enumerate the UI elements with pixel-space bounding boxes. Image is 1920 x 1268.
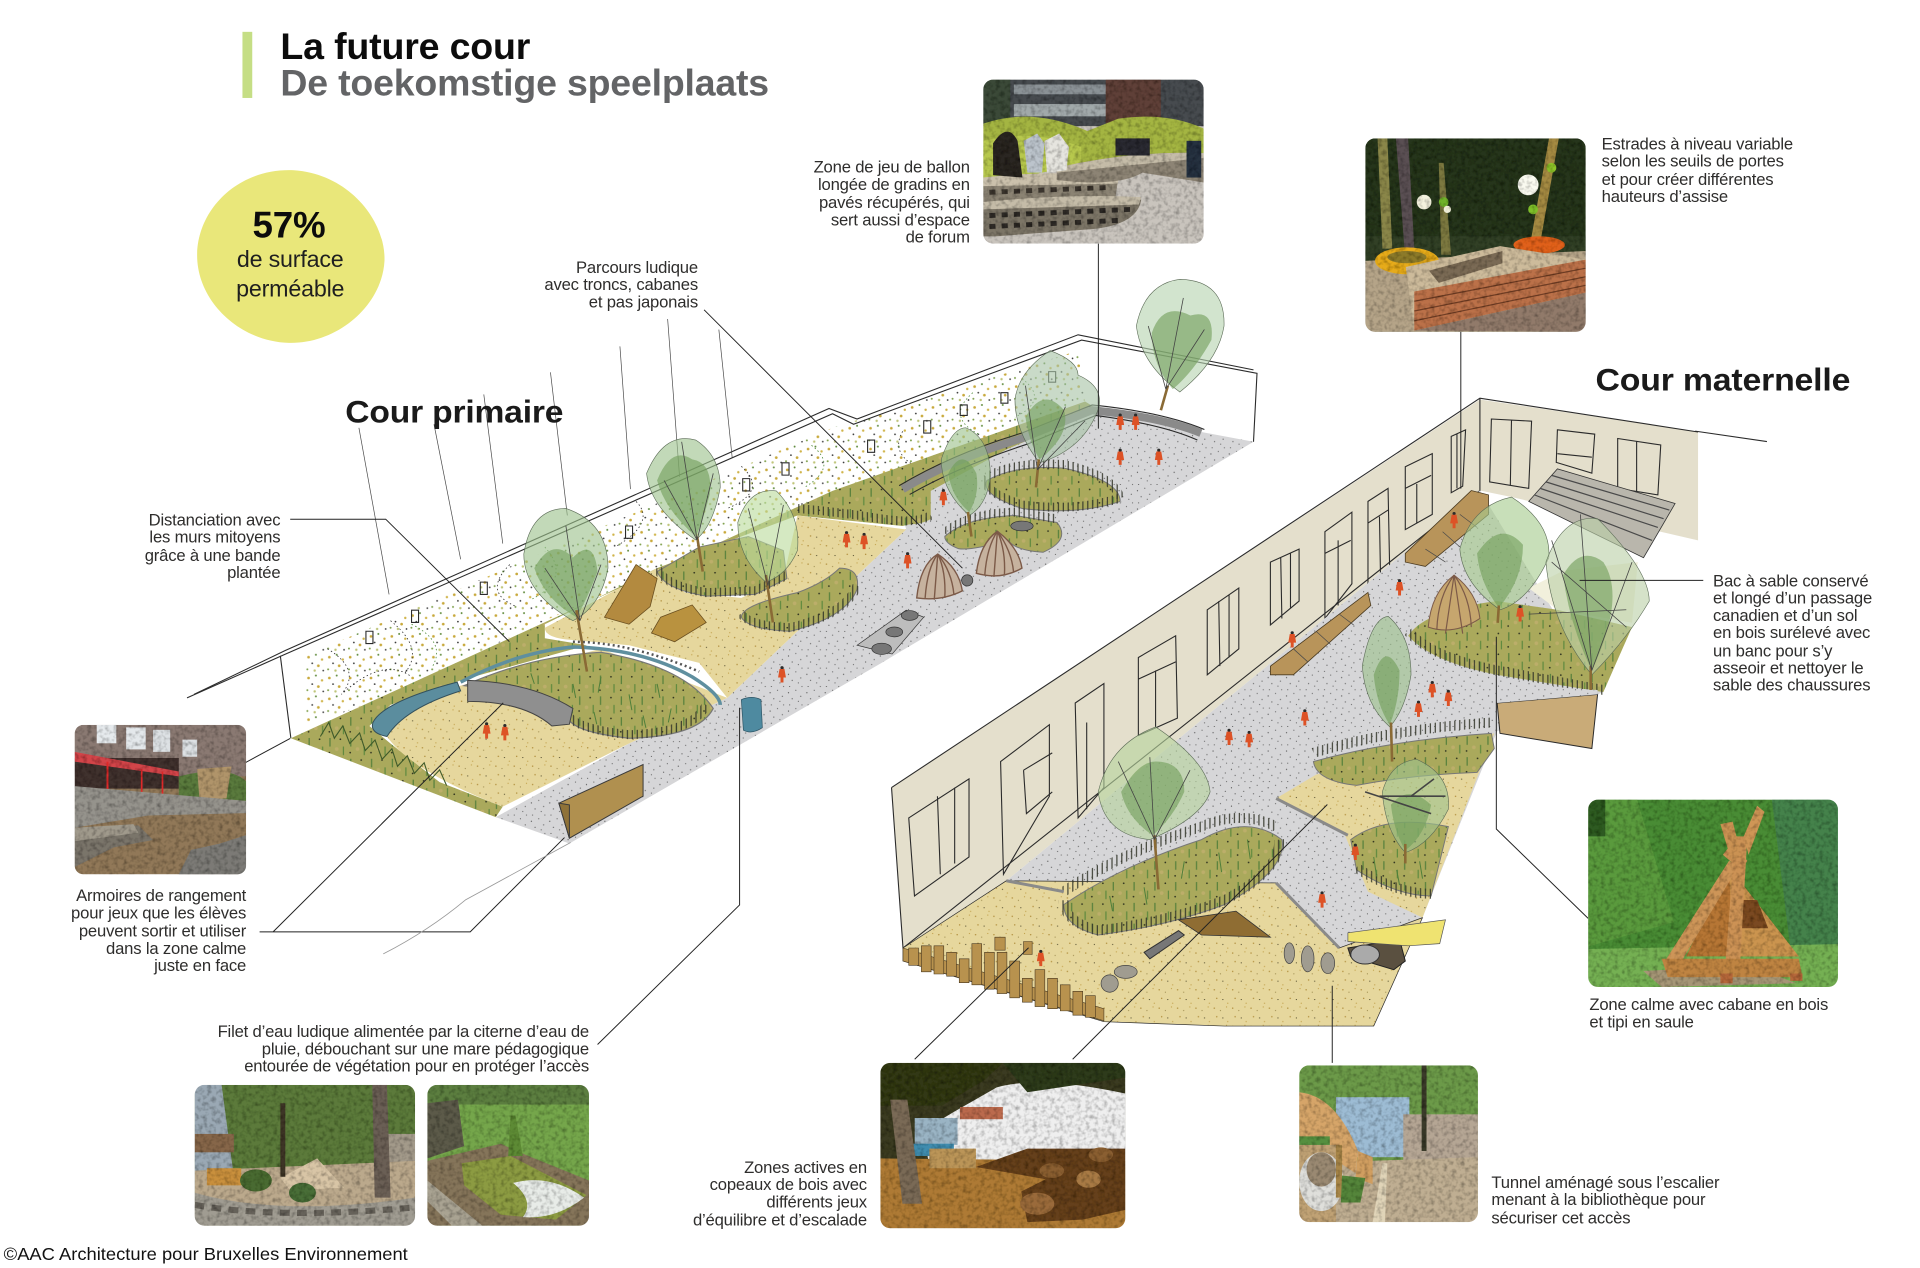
- copyright credit: ©AAC Architecture pour Bruxelles Environnement: [4, 1244, 408, 1264]
- title: De toekomstige speelplaats: [280, 63, 769, 104]
- caption: armoires: juste en face: [153, 956, 246, 975]
- photo: armoires: [75, 725, 246, 874]
- wall outline and vines: [187, 319, 1257, 738]
- balance beam: [1144, 911, 1270, 959]
- willow tipi: [1428, 575, 1480, 634]
- caption: zones actives: [693, 1158, 868, 1230]
- photo: mare: [427, 1085, 589, 1226]
- planted beds: [464, 464, 1120, 738]
- caption: armoires: [71, 886, 247, 975]
- sand area front: [387, 649, 727, 807]
- building wall: [892, 399, 1698, 948]
- children figures: [1037, 512, 1524, 966]
- sandbox wooden box: [1497, 683, 1598, 749]
- caption: zone de jeu: pavés récupérés, qui: [819, 193, 970, 212]
- gravel ground: [1006, 491, 1603, 948]
- caption: parcours ludique: avec troncs, cabanes: [544, 275, 698, 294]
- caption: zone de jeu: sert aussi d’espace: [831, 210, 970, 229]
- sand area back: [545, 515, 906, 698]
- caption: estrades: selon les seuils de portes: [1602, 152, 1784, 171]
- sand area right: [1276, 733, 1494, 918]
- title: [280, 26, 769, 104]
- caption: filet d'eau: pluie, débouchant sur une mare pédagogique: [262, 1039, 589, 1058]
- covered pergola: [1529, 469, 1675, 623]
- caption: estrades: Estrades à niveau variable: [1602, 134, 1793, 153]
- callout: 57% permeable surface: de surface: [237, 246, 344, 272]
- caption: zone calme: Zone calme avec cabane en bois: [1589, 995, 1828, 1014]
- caption: filet d'eau: entourée de végétation pour en protéger l’accès: [244, 1056, 589, 1075]
- windows: [909, 419, 1661, 896]
- caption: armoires: peuvent sortir et utiliser: [79, 922, 247, 941]
- planted beds: [1064, 631, 1603, 935]
- stepping stones: [857, 521, 1033, 654]
- front log row: [903, 937, 1104, 1021]
- caption: zones actives: Zones actives en: [744, 1158, 867, 1177]
- caption: tunnel: [1491, 1173, 1720, 1227]
- caption: parcours ludique: Parcours ludique: [576, 258, 698, 277]
- illustration: cour maternelle: [892, 398, 1767, 1026]
- callout: 57% permeable surface: 57%: [253, 205, 325, 246]
- trees: [524, 279, 1224, 672]
- caption: distanciation: plantée: [227, 563, 280, 582]
- caption: distanciation: Distanciation avec: [149, 510, 280, 529]
- stone kerbs: [1006, 798, 1348, 948]
- planted strip: [291, 401, 1099, 817]
- wooden play structures: [604, 565, 706, 642]
- caption: bac à sable: en bois surélevé avec: [1713, 623, 1870, 642]
- caption: zone de jeu: de forum: [906, 227, 970, 246]
- trees: [1098, 497, 1649, 889]
- photo: estrades: [1365, 138, 1586, 332]
- photo: tipi en bois: [1588, 800, 1838, 987]
- caption: zone de jeu: [814, 158, 970, 246]
- callout: 57% permeable surface: [197, 170, 385, 343]
- caption: zones actives: copeaux de bois avec: [710, 1175, 867, 1194]
- caption: bac à sable: asseoir et nettoyer le: [1713, 658, 1863, 677]
- stepping stones: [1101, 943, 1335, 992]
- caption: parcours ludique: et pas japonais: [589, 292, 698, 311]
- caption: tunnel: sécuriser cet accès: [1491, 1208, 1630, 1227]
- caption: bac à sable: sable des chaussures: [1713, 676, 1870, 695]
- curved bench: [468, 680, 573, 726]
- caption: bac à sable: Bac à sable conservé: [1713, 572, 1868, 591]
- caption: bac à sable: et longé d’un passage: [1713, 589, 1872, 608]
- caption: estrades: hauteurs d’assise: [1602, 187, 1728, 206]
- children figures: [483, 414, 1163, 740]
- caption: zone calme: [1589, 995, 1828, 1031]
- photo: gradins: [983, 80, 1204, 244]
- caption: filet d'eau: [218, 1022, 589, 1075]
- sandbox bed: [1408, 601, 1632, 692]
- caption: tunnel: Tunnel aménagé sous l’escalier: [1491, 1173, 1720, 1192]
- illustration: cour primaire: [187, 279, 1257, 843]
- caption: bac à sable: canadien et d’un sol: [1713, 606, 1857, 625]
- photo: copeaux et troncs: [880, 1063, 1125, 1228]
- long stepped bench: [899, 405, 1204, 494]
- gravel ground: [496, 403, 1253, 843]
- caption: distanciation: les murs mitoyens: [149, 527, 280, 546]
- photo: tunnel: [1299, 1065, 1478, 1222]
- caption: distanciation: [145, 510, 280, 582]
- sand area front: [903, 881, 1423, 1026]
- caption: distanciation: grâce à une bande: [145, 546, 280, 565]
- caption: zone calme: et tipi en saule: [1589, 1012, 1694, 1031]
- caption: filet d'eau: Filet d’eau ludique alimentée par la citerne d’eau de: [218, 1022, 589, 1041]
- rainwater tank: [741, 697, 762, 732]
- vegetation scribble lower strip: [320, 722, 447, 786]
- caption: estrades: [1602, 134, 1793, 206]
- wooden sitting steps: [1270, 491, 1489, 675]
- water channel and pond: [372, 642, 720, 736]
- caption: zones actives: d’équilibre et d’escalade: [693, 1211, 867, 1230]
- caption: zones actives: différents jeux: [766, 1192, 868, 1211]
- caption: bac à sable: un banc pour s’y: [1713, 641, 1833, 660]
- willow huts: [917, 531, 1022, 600]
- caption: zone de jeu: Zone de jeu de ballon: [814, 158, 970, 177]
- title accent bar: [242, 32, 252, 98]
- storage cabinet: [559, 765, 643, 838]
- caption: bac à sable: [1713, 572, 1872, 695]
- caption: parcours ludique: [544, 258, 698, 311]
- caption: estrades: et pour créer différentes: [1602, 170, 1773, 189]
- caption: armoires: pour jeux que les élèves: [71, 903, 246, 922]
- leader lines: [245, 244, 1703, 1063]
- heading: cour maternelle: Cour maternelle: [1596, 362, 1850, 398]
- photo: cour arborée: [195, 1085, 415, 1226]
- tunnel climbing net: [1348, 920, 1445, 970]
- caption: tunnel: menant à la bibliothèque pour: [1491, 1190, 1706, 1209]
- heading: cour primaire: Cour primaire: [345, 393, 563, 429]
- caption: zone de jeu: longée de gradins en: [818, 175, 970, 194]
- callout: 57% permeable surface: perméable: [236, 275, 344, 301]
- caption: armoires: dans la zone calme: [106, 939, 246, 958]
- title: La future cour: [280, 26, 530, 67]
- caption: armoires: Armoires de rangement: [76, 886, 247, 905]
